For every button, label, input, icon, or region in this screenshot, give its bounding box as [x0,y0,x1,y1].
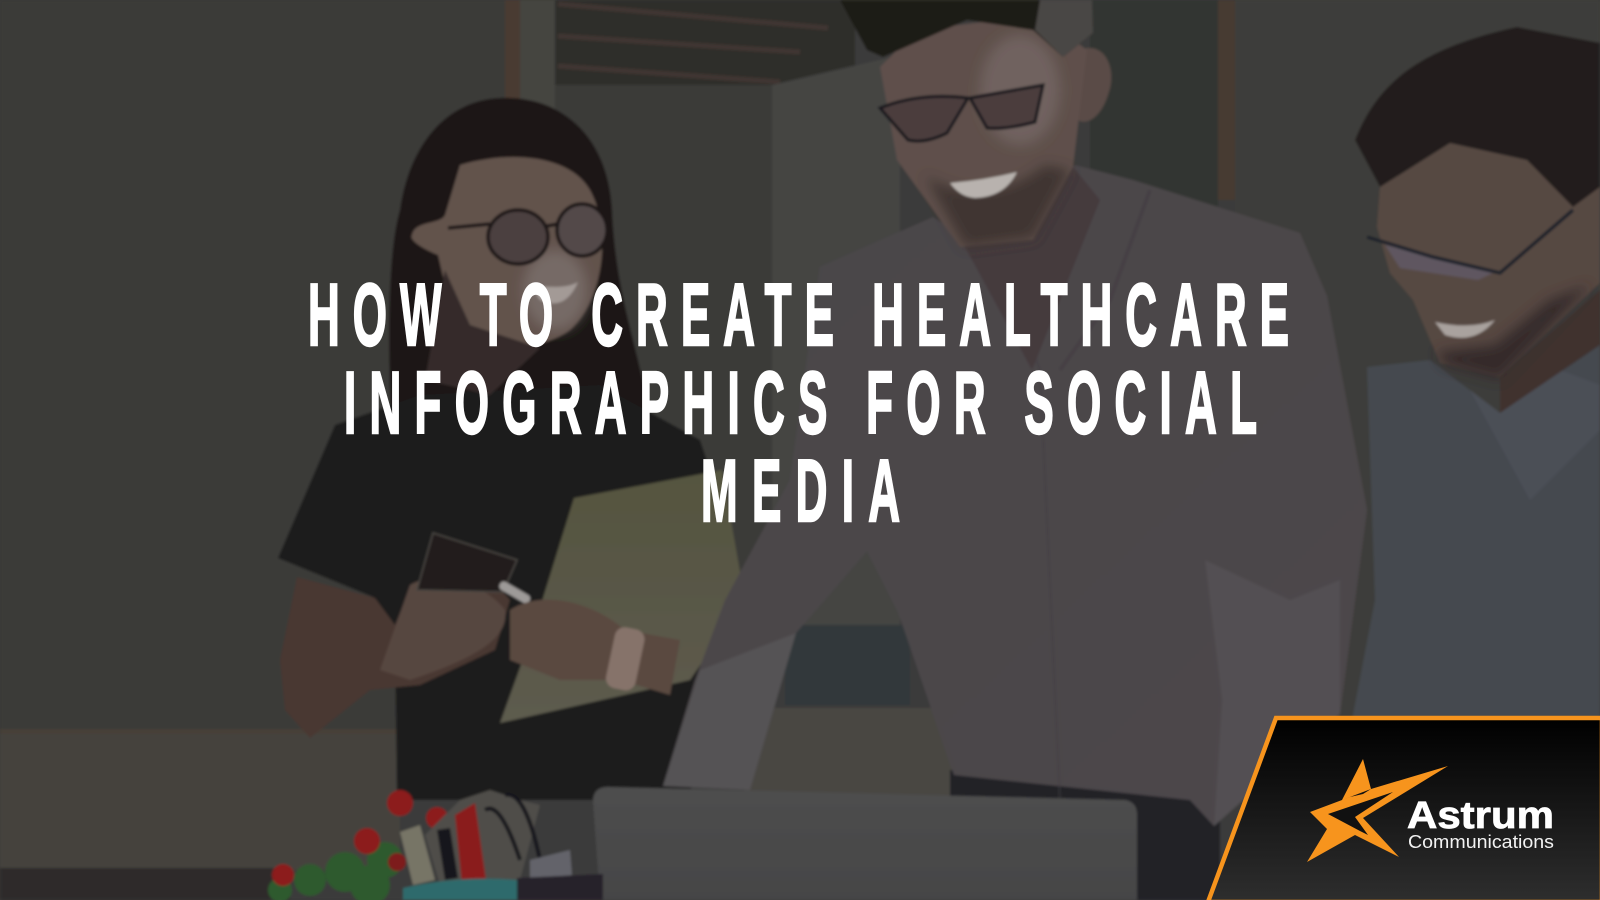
title: three centred lines [308,265,1289,540]
logo wordmark Communications: Communications [1408,832,1554,852]
glasses [448,204,607,264]
laptop [593,787,1137,900]
desk plant and pen holders [268,790,603,900]
ear [1078,48,1111,122]
face [880,15,1087,247]
hair [840,0,1093,57]
glasses [880,85,1043,141]
neck [1500,290,1600,413]
shirt [278,385,720,800]
left arm and hand [280,565,510,738]
smile [530,282,578,303]
neck shadow [425,270,540,395]
title line 2: INFOGRAPHICS FOR SOCIAL [344,353,1257,452]
folder [500,470,745,723]
trousers [950,770,1220,900]
right hand and watch [510,600,680,695]
hair [389,98,650,800]
face [411,157,602,345]
panel with orange border [1208,718,1600,900]
phone [417,533,517,592]
teeth [950,172,1017,198]
face [1377,143,1600,377]
logo panel [1208,718,1600,900]
neck [965,167,1100,370]
hair [1355,27,1600,207]
logo wordmark Astrum: Astrum [1407,795,1554,837]
title line 1: HOW TO CREATE HEALTHCARE [308,265,1289,364]
smile [1435,320,1495,338]
centre man in pink shirt [663,0,1367,900]
title line 3: MEDIA [701,441,900,540]
glasses [1367,210,1573,280]
shirt [1352,345,1600,720]
woman with glasses holding phone and folder [278,98,745,800]
shirt [663,165,1367,826]
icon: orange star [1307,759,1448,862]
right man in blue shirt [1352,27,1600,720]
